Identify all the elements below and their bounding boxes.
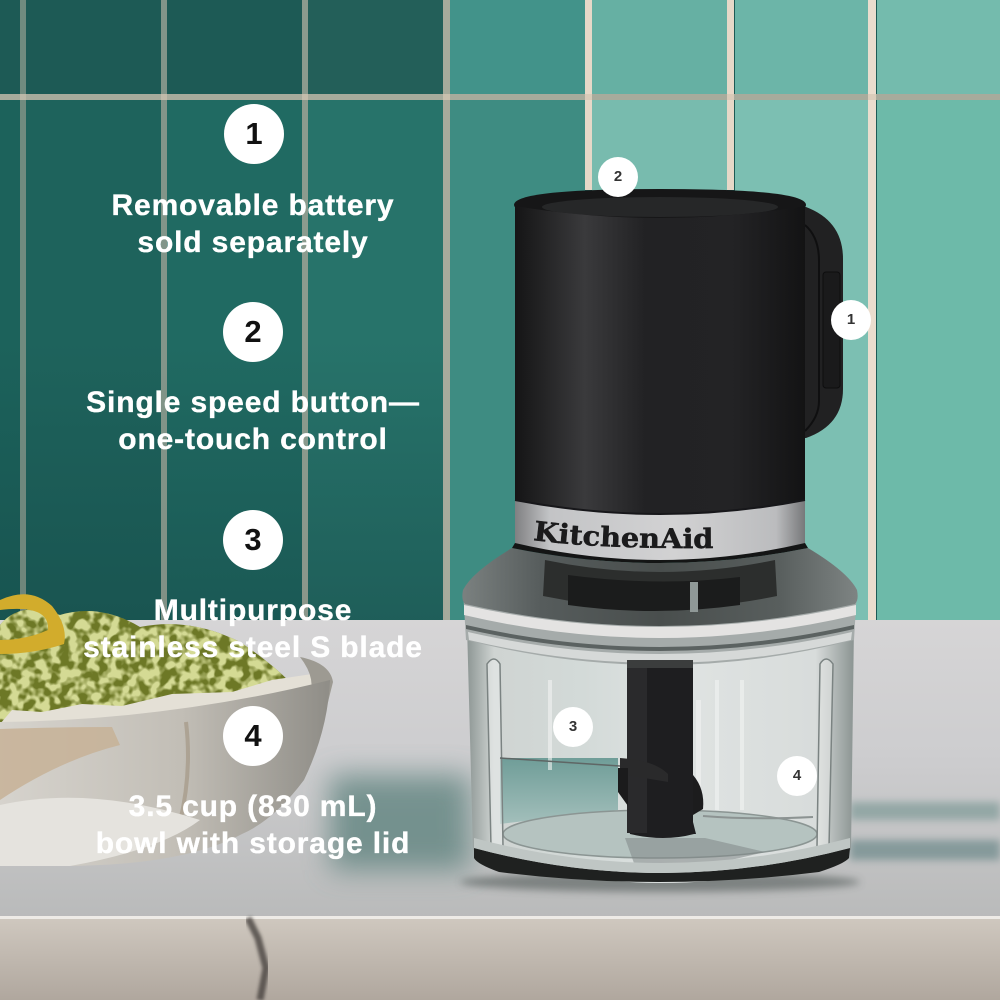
marker 1: 1 [847,311,855,328]
lid shoulder [462,548,858,626]
bowl with food [0,594,333,866]
marker 2 [598,157,638,197]
marker 4 [777,756,817,796]
feature text 2: Single speed button— [86,386,420,419]
feature text 3: Multipurpose [154,594,352,627]
marker 3: 3 [569,718,577,735]
collar [463,590,857,665]
feature text 4: 3.5 cup (830 mL) [129,790,377,823]
marker 4: 4 [793,767,801,784]
neck [543,560,777,608]
feature text 2: one-touch control [118,423,388,456]
number badge 3: 3 [244,522,262,557]
number badge 2: 2 [244,314,262,349]
teal reflection [500,758,618,824]
lid top [514,189,806,219]
marker 3 [553,707,593,747]
feature text 1 [112,189,394,259]
feature text 2 [86,386,420,456]
tile wall [0,0,1000,630]
number badge 4 [223,706,283,766]
feature text 4: bowl with storage lid [96,827,410,860]
feature text 3: stainless steel S blade [83,631,423,664]
number badge 1: 1 [245,116,263,151]
cream [0,674,322,726]
steel band [515,500,805,562]
clear bowl body [467,625,854,883]
feature text 1: sold separately [137,226,369,259]
number badge 1 [224,104,284,164]
number badge 2 [223,302,283,362]
KitchenAid logo [533,540,714,548]
chopper [460,189,860,892]
bowl floor [503,810,817,858]
number badge 3 [223,510,283,570]
blade shaft [627,662,696,838]
feature text 4 [96,790,410,860]
marker 1 [831,300,871,340]
ribs [487,659,503,847]
product photo background with chopper: KitchenAid [534,520,714,549]
motor body [515,206,805,524]
lemon peel [0,594,65,654]
marker 2: 2 [614,168,622,185]
feature text 3 [83,594,423,664]
handle [800,207,843,438]
number badge 4: 4 [244,718,262,753]
base ring [474,848,850,882]
bowl rim and body [300,657,333,702]
marble counter [0,620,1000,1000]
feature text 1: Removable battery [112,189,394,222]
